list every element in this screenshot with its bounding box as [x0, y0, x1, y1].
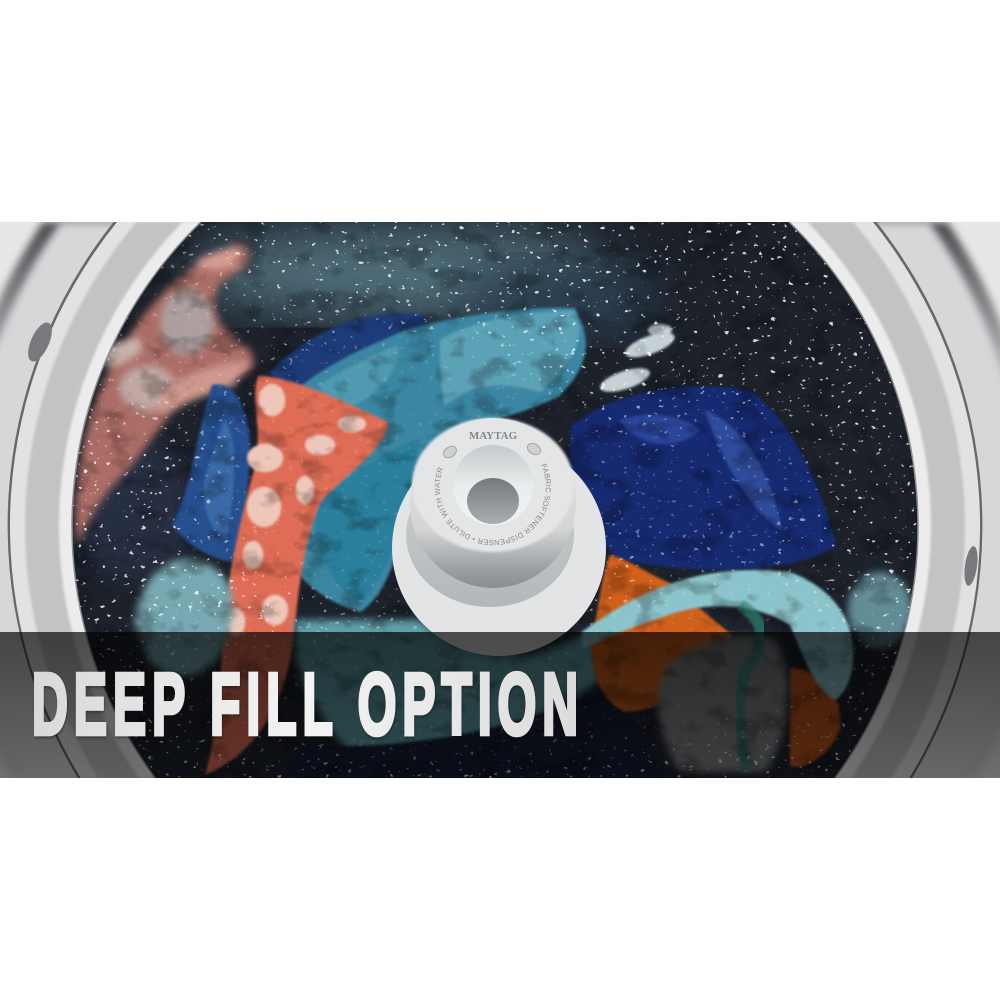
tub water and laundry	[72, 222, 918, 778]
dark blue cloth right	[570, 386, 836, 570]
pale water lower right	[848, 572, 912, 648]
navy cloth top	[269, 312, 428, 386]
dispenser ring label: FABRIC SOFTENER DISPENSER • DILUTE WITH WATER	[434, 464, 551, 546]
caption band	[0, 632, 1000, 778]
dispenser right symbol	[525, 441, 543, 457]
infographic image	[0, 222, 1000, 778]
light blue cloth	[582, 570, 853, 700]
dispenser cup outer	[453, 445, 533, 525]
grey cloth	[658, 635, 788, 772]
dispenser cap	[410, 418, 576, 588]
washer cabinet	[0, 222, 1000, 778]
dispenser cup hole	[467, 478, 519, 524]
dispenser lower ring	[406, 463, 574, 607]
orange cloth	[590, 555, 841, 767]
upper water tone	[190, 226, 610, 318]
dispenser base	[392, 440, 606, 656]
dark blue bottom laundry	[340, 708, 557, 756]
dispenser left symbol	[441, 444, 459, 460]
water glare near dark blue cloth	[597, 324, 678, 397]
rim latch left	[23, 319, 57, 365]
green stripe	[739, 605, 761, 772]
pink cloth upper left	[76, 243, 253, 545]
washer photo	[0, 222, 1000, 778]
washer rim rings	[0, 222, 1000, 778]
denim jeans	[172, 384, 250, 562]
water sparkles	[72, 222, 918, 778]
fabric softener dispenser	[392, 416, 606, 656]
fabric folds	[72, 222, 918, 778]
dark water	[72, 222, 918, 778]
caption title: DEEP FILL OPTION	[32, 657, 578, 754]
tub inner edge	[72, 222, 918, 778]
teal cloth center	[283, 308, 586, 612]
dispenser brand label: MAYTAG	[469, 430, 518, 442]
pale teal cloth lower left	[135, 559, 233, 676]
coral patterned cloth	[205, 376, 388, 775]
teal cloth lower centre	[295, 620, 620, 752]
rim latch right	[962, 545, 980, 587]
dispenser top face	[412, 418, 574, 552]
